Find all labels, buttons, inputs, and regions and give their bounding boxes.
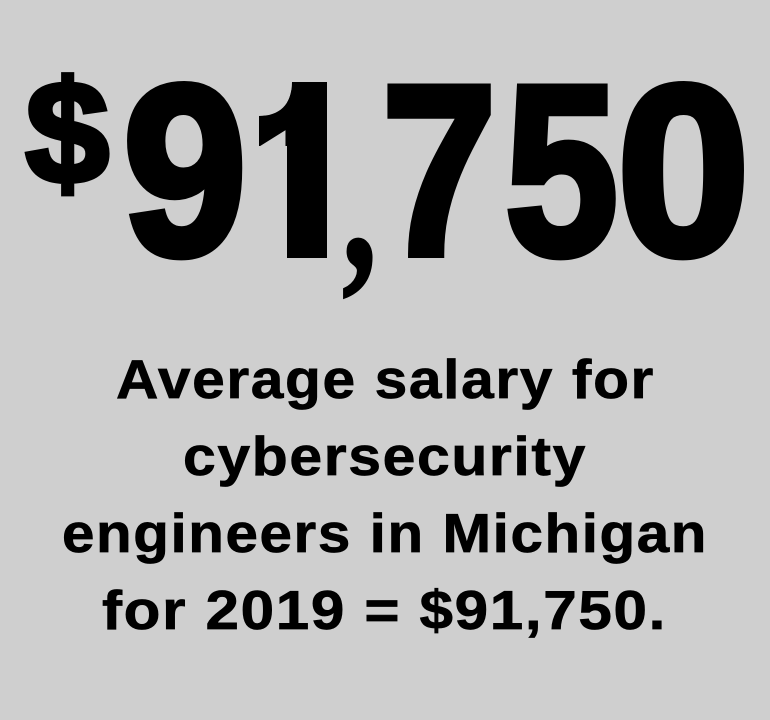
caption text: engineers in Michigan [62, 502, 708, 564]
caption text: for 2019 = $91,750. [102, 579, 667, 641]
caption text: cybersecurity [183, 425, 587, 487]
big salary figure [24, 72, 744, 300]
big salary figure: , [342, 93, 377, 310]
big salary figure: 9 [123, 36, 247, 306]
big salary figure: 0 [617, 35, 750, 305]
big salary figure: 7 [382, 35, 496, 306]
big salary figure: 1 [237, 36, 372, 306]
caption text [62, 348, 708, 641]
big salary figure: $ [26, 52, 109, 215]
caption text: Average salary for [116, 348, 655, 410]
big salary figure: 5 [505, 36, 618, 306]
